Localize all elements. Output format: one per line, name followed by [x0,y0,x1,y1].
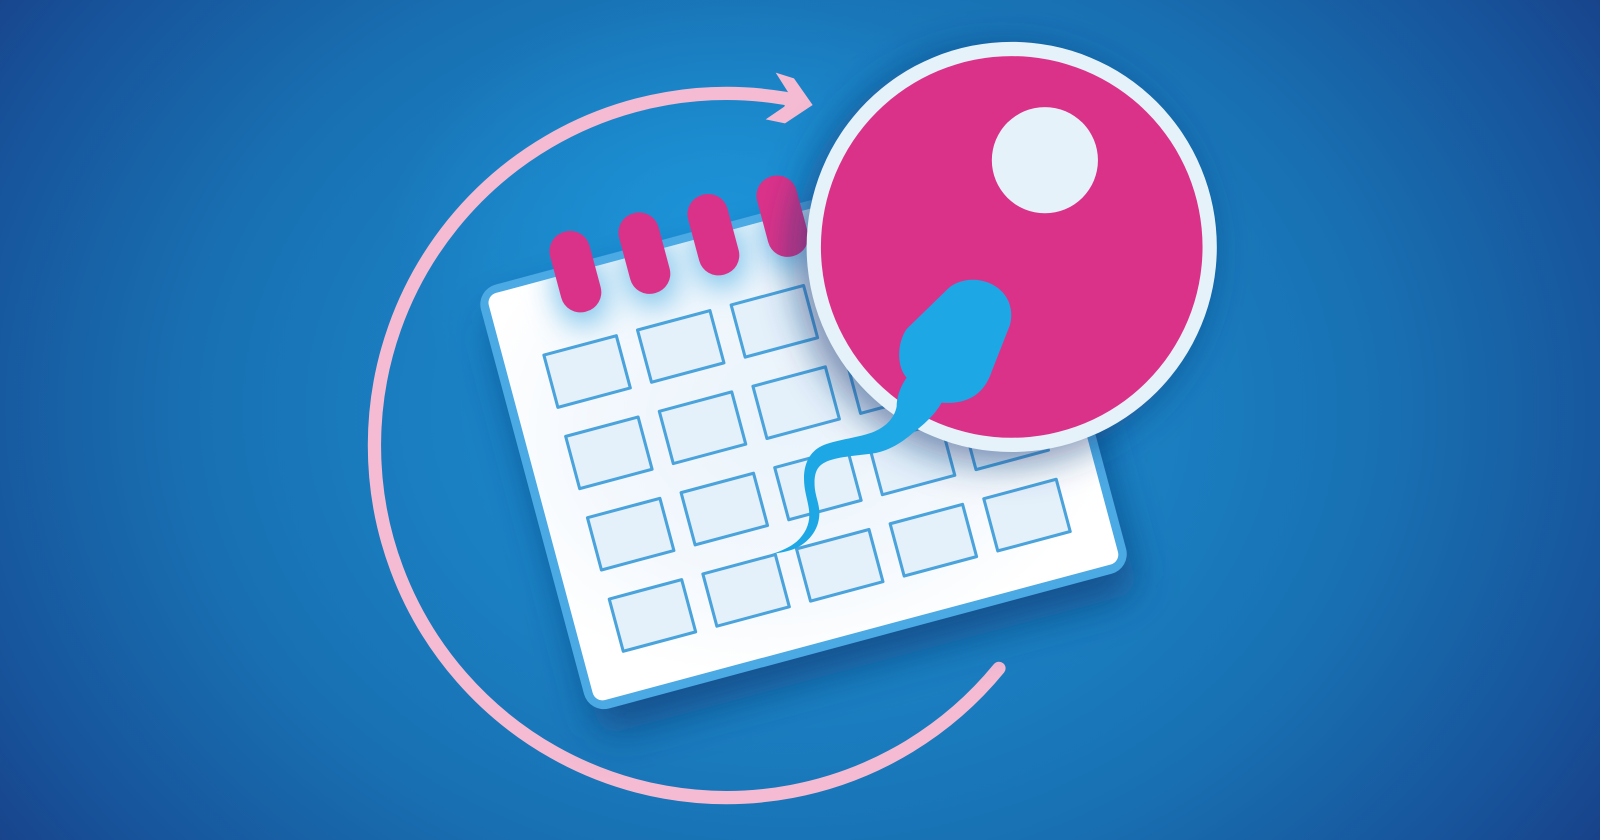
binding rings [545,171,813,317]
egg outer membrane [807,42,1217,452]
egg cytoplasm [821,56,1203,438]
sperm [772,280,1011,554]
calendar [467,112,1139,737]
calendar border [476,145,1131,714]
egg shadow [793,46,1211,464]
calendar page [486,155,1121,703]
arrowhead [766,73,813,123]
day cells grid [544,235,1070,651]
calendar shadow [489,173,1139,736]
glow under binding rings [550,197,818,329]
egg cell [793,42,1217,464]
arc [374,93,999,798]
egg nucleus [992,107,1098,213]
cycle arrow: circular pink arc with arrowhead [374,73,999,798]
